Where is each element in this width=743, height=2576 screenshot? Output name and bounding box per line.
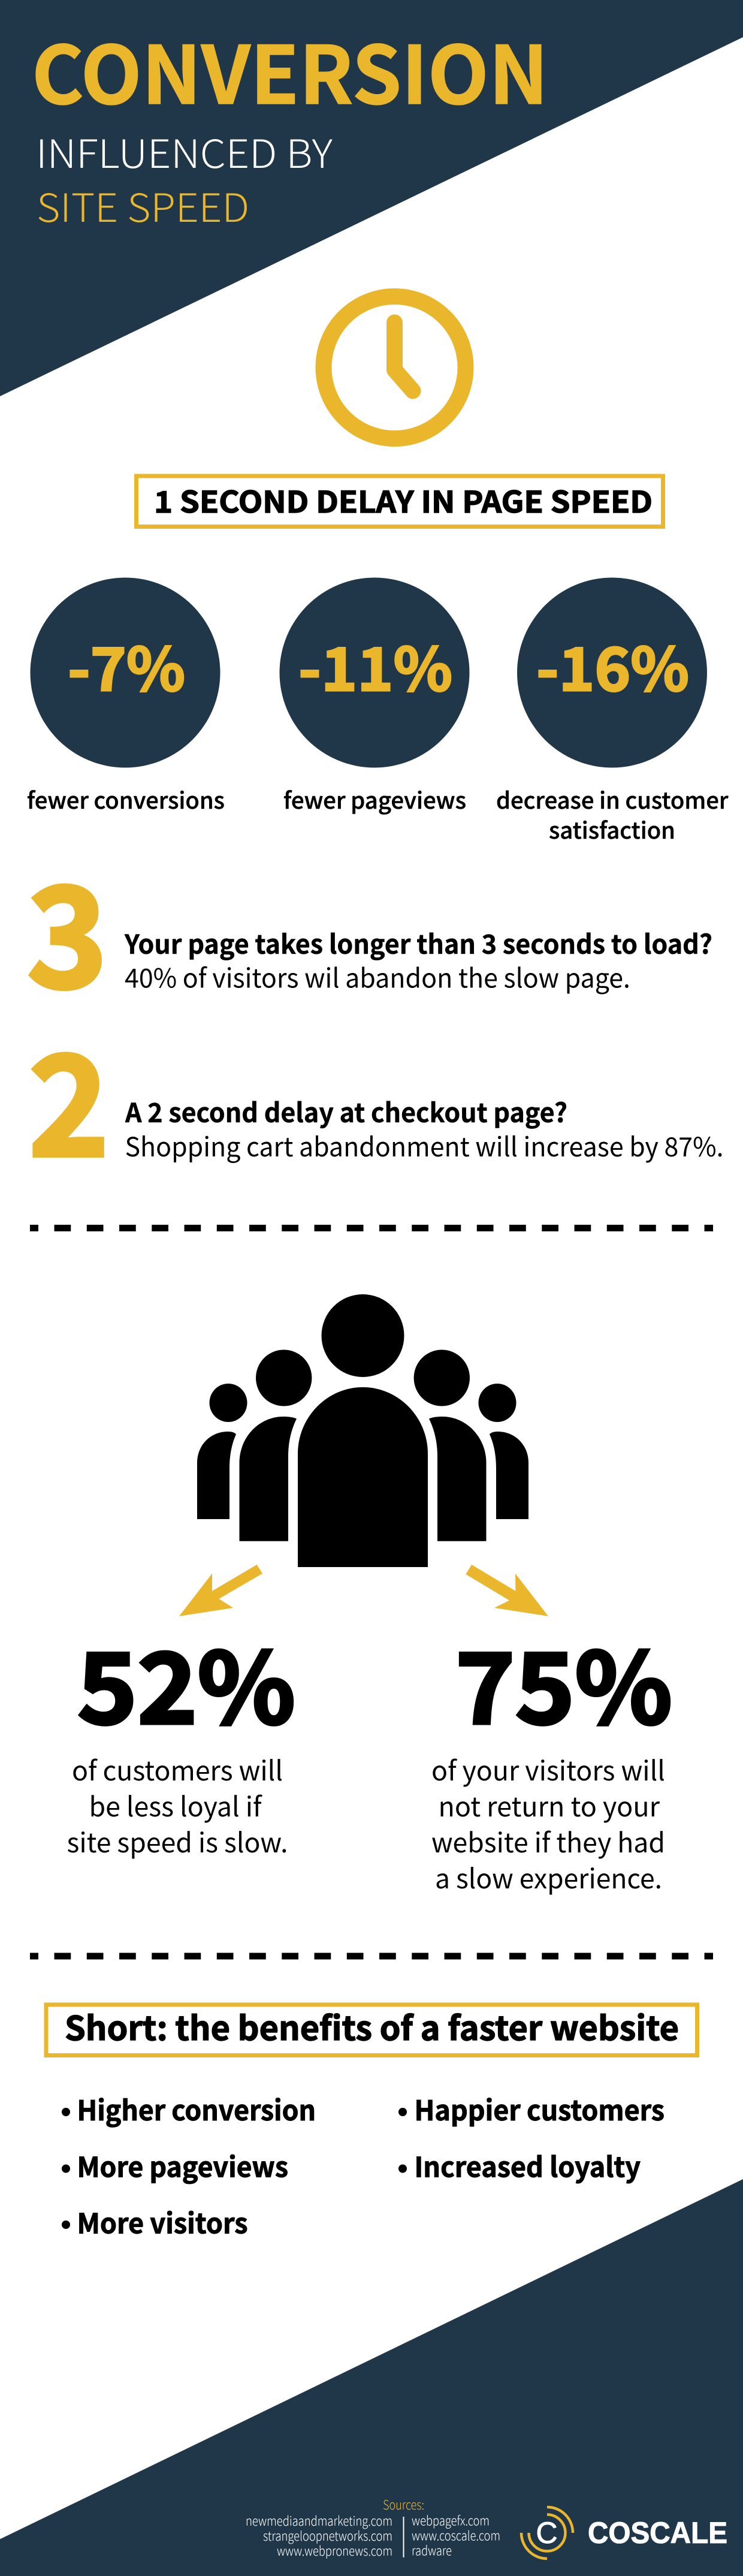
sources: www.coscale.com	[412, 2526, 500, 2544]
logo: coscale: C	[536, 2516, 557, 2550]
stat: -11% fewer pageviews	[279, 578, 470, 815]
benefit: increased loyalty: Increased loyalty	[415, 2146, 641, 2186]
benefit: higher conversion: Higher conversion	[77, 2089, 316, 2129]
fact: 2 seconds: 2	[29, 995, 109, 1196]
logo: coscale: COSCALE	[588, 2516, 727, 2550]
heading: 1 second delay: 1 SECOND DELAY IN PAGE SPEED	[154, 479, 653, 522]
stat: 75% will not return: website if they had	[431, 1821, 665, 1860]
stat: 52% less loyal: 52%	[77, 1610, 295, 1752]
stat: -16% decrease in customer satisfaction: -16%	[536, 622, 689, 708]
stat: 75% will not return	[431, 1610, 672, 1896]
fact: 3 seconds	[27, 826, 712, 1028]
stat: -7% fewer conversions	[27, 578, 225, 815]
fact: 2 seconds	[29, 995, 724, 1196]
fact: 3 seconds: Your page takes longer than 3 seconds to load?	[124, 923, 712, 962]
heading: benefits: Short: the benefits of a faster website	[65, 2002, 679, 2050]
sources: webpagefx.com	[412, 2511, 490, 2530]
title block	[32, 12, 548, 233]
stat: -7% fewer conversions: -7%	[68, 622, 185, 708]
top navy diagonal banner	[0, 0, 743, 396]
subtitle: site speed: SITE SPEED	[37, 177, 249, 233]
stat: 52% less loyal: be less loyal if	[89, 1785, 263, 1824]
sources: www.webpronews.com	[277, 2541, 392, 2560]
bottom navy diagonal banner	[0, 2179, 743, 2576]
fact: 2 seconds: A 2 second delay at checkout page?	[125, 1092, 567, 1130]
sources: radware	[412, 2541, 452, 2560]
sources	[246, 2495, 500, 2560]
stat: -7% fewer conversions: fewer conversions	[27, 782, 225, 815]
fact: 2 seconds: Shopping cart abandonment will increase by 87%.	[125, 1126, 724, 1164]
logo: coscale	[521, 2507, 727, 2559]
stat: 75% will not return: of your visitors will	[431, 1749, 665, 1788]
icon: group of people	[197, 1294, 528, 1567]
stat: 52% less loyal: of customers will	[72, 1749, 283, 1788]
benefit: happier customers: Happier customers	[415, 2089, 665, 2129]
stat: 52% less loyal	[67, 1610, 295, 1860]
subtitle: influenced by: INFLUENCED BY	[36, 123, 333, 179]
arrow: down left	[179, 1565, 262, 1616]
stat: -16% decrease in customer satisfaction	[496, 578, 729, 845]
arrow: down right	[466, 1565, 548, 1616]
stat: 75% will not return: a slow experience.	[435, 1857, 662, 1896]
sources: Sources:	[383, 2495, 424, 2514]
benefit: more pageviews: More pageviews	[77, 2146, 288, 2186]
icon: clock	[324, 296, 466, 439]
list: benefits	[62, 2089, 665, 2241]
fact: 3 seconds: 3	[27, 826, 108, 1028]
title: conversion: CONVERSION	[32, 12, 548, 127]
sources: strangeloopnetworks.com	[263, 2526, 392, 2545]
benefit: more visitors: More visitors	[77, 2202, 248, 2241]
stat: 52% less loyal: site speed is slow.	[67, 1821, 288, 1860]
stat: 75% will not return: not return to your	[439, 1785, 660, 1824]
sources: newmediaandmarketing.com	[246, 2511, 392, 2530]
stat: -11% fewer pageviews: fewer pageviews	[283, 782, 466, 815]
stat: -16% decrease in customer satisfaction: satisfaction	[549, 812, 675, 845]
stat: -16% decrease in customer satisfaction: decrease in customer	[496, 782, 729, 815]
stat: 75% will not return: 75%	[455, 1610, 672, 1752]
fact: 3 seconds: 40% of visitors wil abandon the slow page.	[125, 957, 630, 995]
stat: -11% fewer pageviews: -11%	[298, 622, 452, 708]
